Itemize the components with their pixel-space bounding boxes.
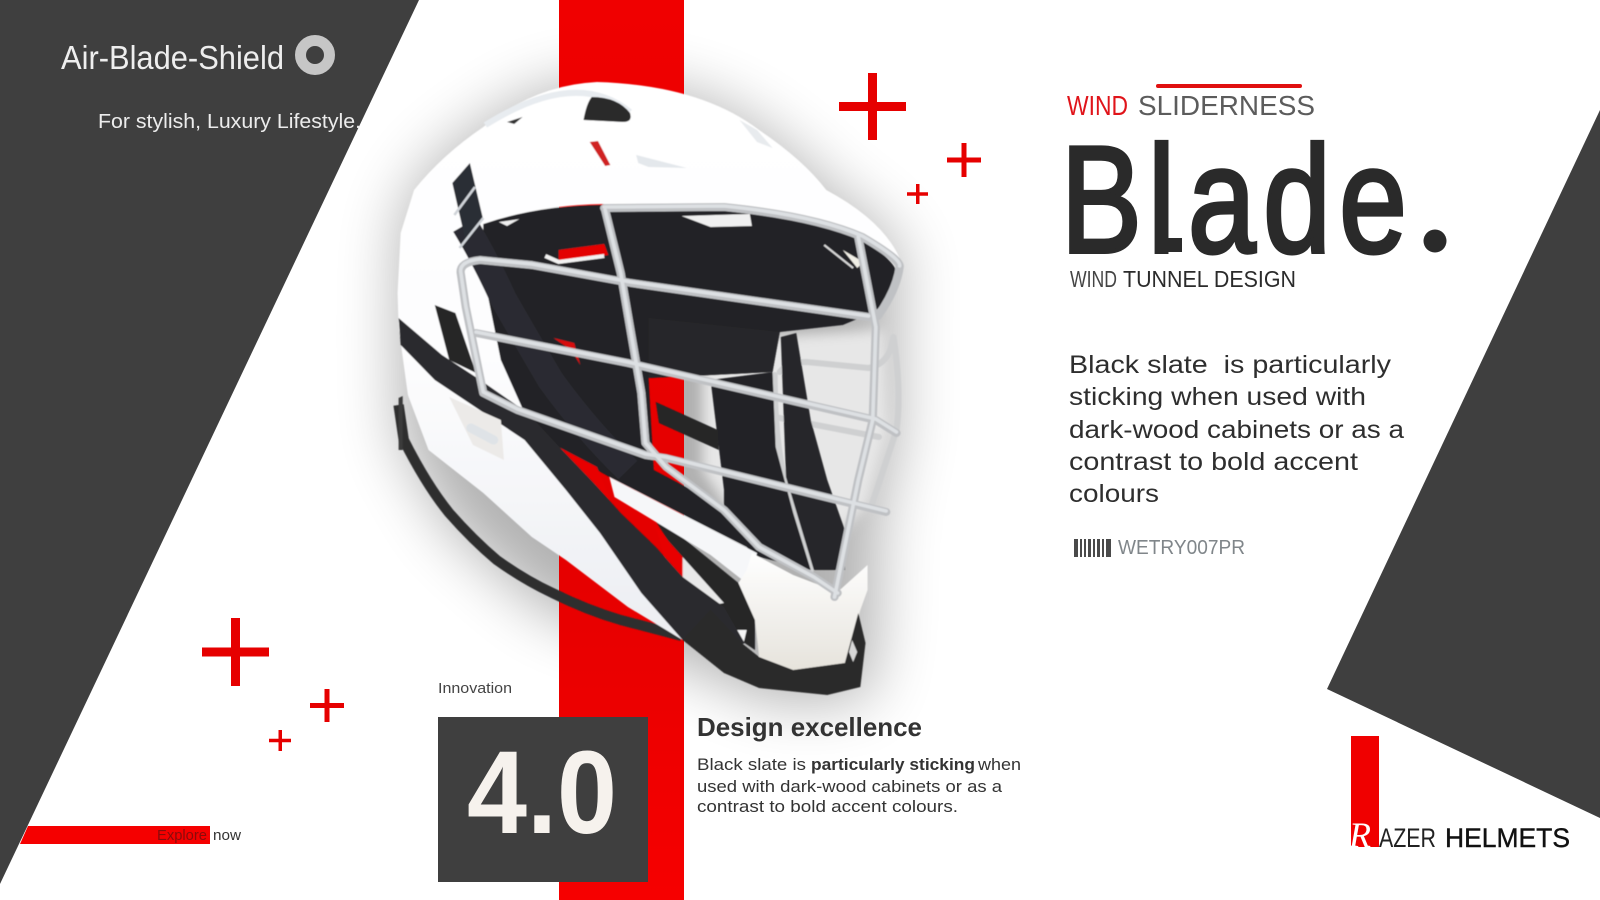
- sliderness heading: SLIDERNESS: [1138, 90, 1315, 121]
- icon: medium plus bottom: [310, 689, 344, 722]
- wind tunnel subtitle: WIND: [1070, 266, 1117, 292]
- inner diagonal strap: [465, 225, 628, 470]
- barcode code: WETRY007PR: [1118, 537, 1245, 559]
- logo: [1348, 736, 1570, 855]
- crossing strap: [656, 402, 719, 450]
- version box: [438, 717, 648, 882]
- icon: medium plus top: [947, 143, 981, 177]
- icon: small plus top: [907, 184, 928, 204]
- chin strap: [683, 610, 866, 695]
- cage highlights: [461, 206, 900, 597]
- liner highlights: [682, 214, 752, 227]
- description paragraph: sticking when used with: [1069, 383, 1366, 411]
- dark angular panel right: [1327, 110, 1600, 818]
- side detail: [449, 397, 504, 460]
- white inner rim: [545, 256, 604, 262]
- dark diagonal panel left: [0, 0, 419, 884]
- rim hole: [507, 117, 523, 124]
- helmet drop shadow: [399, 82, 902, 702]
- red lower opening: [559, 447, 610, 500]
- icon: barcode: [1074, 539, 1111, 557]
- accent line: [1156, 84, 1302, 88]
- helmet illustration: [398, 82, 902, 695]
- far side cage: [775, 337, 898, 570]
- red lower accent: [656, 527, 683, 590]
- red through opening: [559, 244, 608, 262]
- brand name: Air-Blade-Shield: [61, 39, 284, 76]
- sliderness heading: [1067, 84, 1315, 121]
- chin vent: [849, 640, 857, 662]
- white gap detail: [728, 630, 747, 643]
- logo: AZER: [1379, 823, 1436, 853]
- vent slit: [590, 141, 610, 166]
- description paragraph: Black slate is particularly: [1069, 351, 1392, 379]
- red on liner: [554, 338, 580, 365]
- sliderness heading: WIND: [1067, 90, 1128, 121]
- back strap: [399, 405, 682, 636]
- description paragraph: colours: [1069, 480, 1159, 508]
- Blade title: .: [1430, 224, 1438, 257]
- main side strap: [399, 318, 745, 660]
- inner right strap: [781, 333, 845, 570]
- lower strap cluster: [649, 510, 755, 650]
- right liner panel: [711, 372, 811, 570]
- face cage: [461, 207, 900, 597]
- buckle lines: [454, 187, 483, 248]
- description paragraph: [1069, 351, 1404, 508]
- explore now button: now: [213, 827, 241, 844]
- version box: 4.0: [467, 727, 617, 859]
- design excellence body: [697, 755, 1021, 816]
- light area seen through cage: [702, 330, 888, 560]
- innovation label: Innovation: [438, 680, 512, 697]
- icon: large plus bottom: [202, 618, 269, 686]
- icon: small plus bottom: [269, 730, 291, 751]
- right top vent: [739, 120, 773, 148]
- rear buckle: [399, 396, 403, 450]
- gap triangle: [683, 557, 724, 607]
- white cheek strip: [609, 477, 757, 585]
- red vertical band: [559, 0, 684, 900]
- logo: R: [1348, 815, 1371, 855]
- shell: [398, 82, 902, 640]
- design excellence body: particularly sticking: [811, 755, 975, 774]
- logo: HELMETS: [1445, 823, 1570, 853]
- icon: ring: [300, 40, 330, 70]
- side handle: [471, 428, 494, 440]
- design excellence heading: Design excellence: [697, 712, 922, 742]
- top vent: [584, 97, 631, 122]
- design excellence body: used with dark-wood cabinets or as a: [697, 777, 1003, 796]
- chin guard: [738, 553, 868, 670]
- explore now button: Explore: [157, 827, 207, 844]
- design excellence body: when: [977, 755, 1021, 774]
- description paragraph: dark-wood cabinets or as a: [1069, 416, 1404, 444]
- side vent: [435, 305, 476, 373]
- Blade title: Blade: [1061, 115, 1407, 285]
- lighter liner panel: [649, 318, 780, 378]
- design excellence body: contrast to bold accent colours.: [697, 797, 958, 816]
- design excellence body: Black slate is: [697, 755, 806, 774]
- upper buckle: [452, 163, 483, 237]
- description paragraph: contrast to bold accent: [1069, 448, 1358, 476]
- face opening dark liner: [483, 205, 896, 552]
- vent wedge: [636, 155, 687, 168]
- icon: large plus top: [839, 73, 906, 140]
- wind tunnel subtitle: TUNNEL DESIGN: [1123, 266, 1296, 292]
- tagline: For stylish, Luxury Lifestyle.: [98, 111, 361, 133]
- explore now button: [0, 826, 241, 844]
- top rim highlight: [485, 93, 630, 125]
